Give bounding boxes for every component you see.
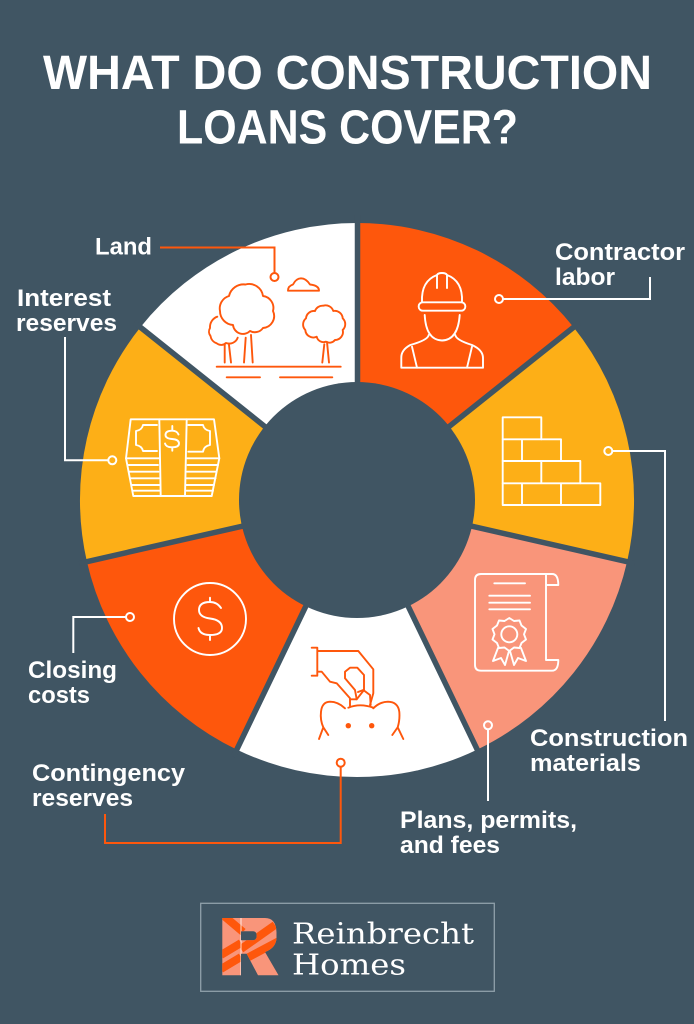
leader: construction materials — [604, 447, 665, 721]
label: contingency reserves: Contingency — [32, 760, 186, 787]
label: closing costs — [28, 657, 117, 709]
label: land: Land — [95, 234, 152, 260]
label: plans, permits, and fees: Plans, permits, — [400, 807, 577, 834]
icon: cloud — [288, 278, 319, 291]
label: closing costs: costs — [28, 682, 90, 709]
leader: contingency reserves — [105, 759, 345, 843]
segment: plans, permits, and fees — [357, 500, 627, 750]
label: construction materials: Construction — [530, 725, 688, 752]
label: interest reserves: reserves — [16, 310, 117, 337]
leader: contractor labor — [495, 277, 650, 303]
label: interest reserves: Interest — [17, 285, 111, 312]
logo: Reinbrecht Homes — [201, 903, 494, 991]
segment: contractor labor — [357, 223, 574, 500]
title: LOANS COVER? — [177, 102, 518, 154]
title — [43, 47, 652, 154]
label: plans, permits, and fees: and fees — [400, 832, 500, 859]
icon: permit scroll — [475, 574, 558, 671]
label: plans, permits, and fees — [400, 807, 577, 859]
label: closing costs: Closing — [28, 657, 117, 684]
logo: Reinbrecht Homes: Reinbrecht — [292, 916, 474, 950]
label: interest reserves — [16, 285, 117, 337]
label: contractor labor: labor — [555, 264, 615, 291]
leader: interest reserves — [65, 337, 116, 464]
title: WHAT DO CONSTRUCTION — [43, 47, 652, 100]
icon: brick wall — [503, 417, 600, 505]
icon: trees — [209, 278, 345, 377]
icon: dollar coin — [174, 583, 246, 655]
leader: closing costs — [73, 613, 134, 653]
label: construction materials: materials — [530, 750, 641, 777]
leader: plans, permits, and fees — [484, 721, 492, 801]
donut chart — [79, 215, 635, 777]
icon: construction worker — [401, 273, 483, 368]
segment: closing costs — [87, 500, 357, 750]
label: contingency reserves — [32, 760, 186, 812]
logo: Reinbrecht Homes: Homes — [292, 948, 406, 982]
icon: stack of money — [126, 419, 219, 496]
logo mark: R — [221, 916, 280, 977]
icon: hand and piggy bank — [312, 648, 403, 739]
segment: contingency reserves — [237, 500, 477, 777]
segment: construction materials — [357, 327, 634, 562]
label: contingency reserves: reserves — [32, 785, 133, 812]
label: contractor labor — [555, 239, 685, 291]
leader: land — [160, 248, 278, 281]
label: construction materials — [530, 725, 688, 777]
segment: interest reserves — [80, 327, 357, 562]
segment: land — [140, 223, 357, 500]
donut hole — [239, 382, 475, 618]
label: contractor labor: Contractor — [555, 239, 685, 266]
